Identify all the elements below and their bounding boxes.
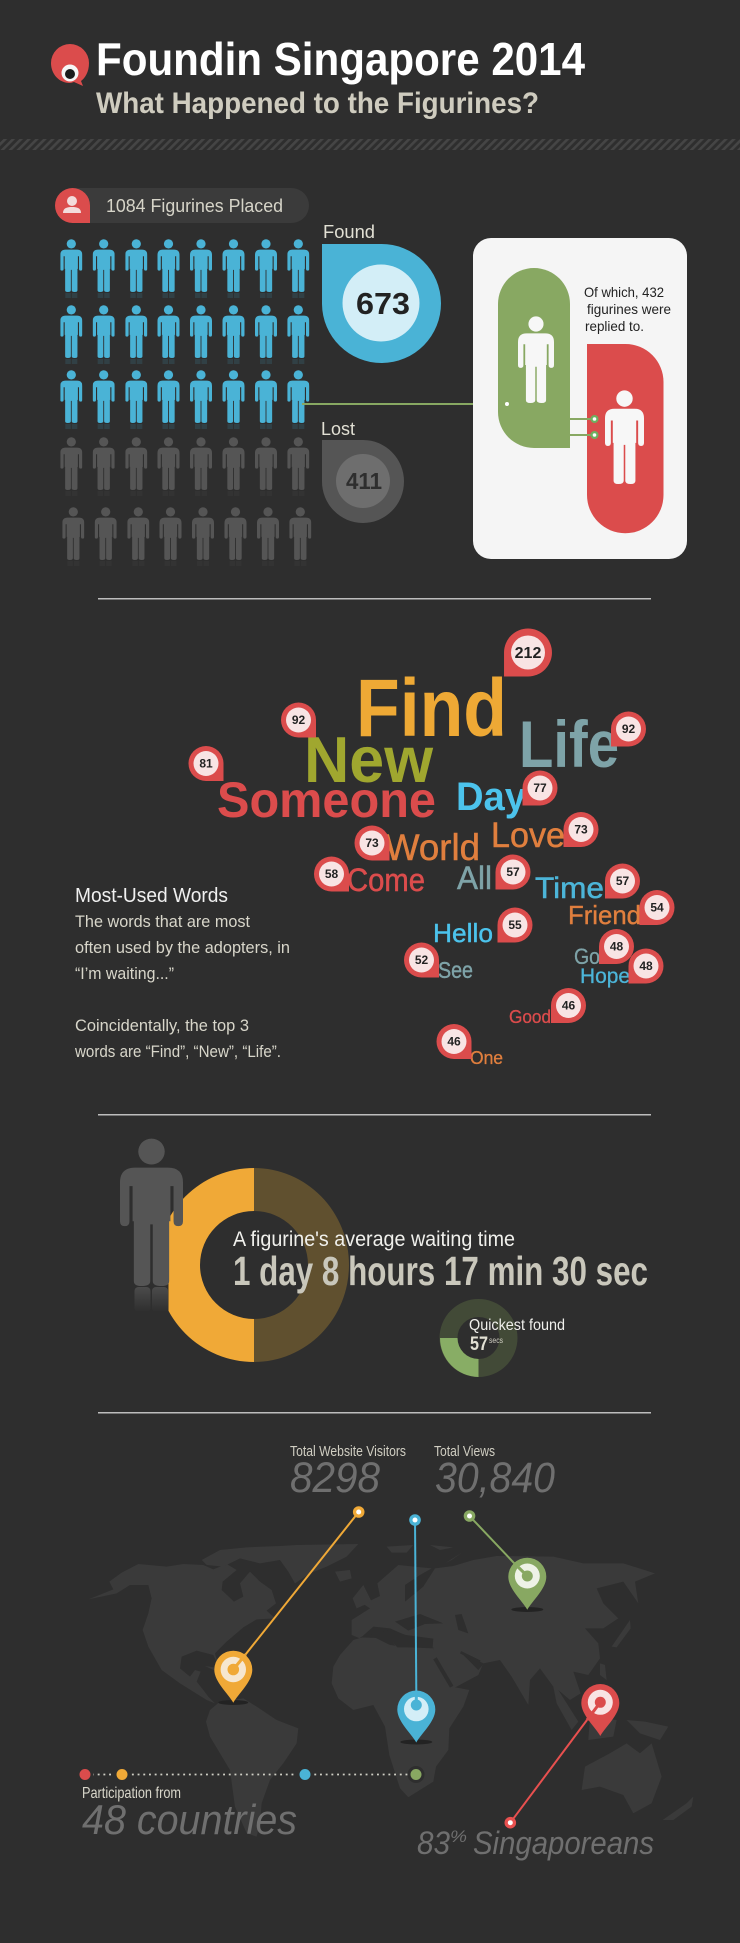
text: quickest found <box>469 1317 565 1355</box>
pin: 92 New <box>281 702 316 738</box>
timeline: participation dots <box>78 1768 423 1782</box>
donut chart: quickest found <box>440 1308 508 1377</box>
stat: total views: 30,840 <box>435 1454 555 1502</box>
pin: 55 Hello: 55 <box>508 918 522 932</box>
text: of which 432 replied <box>584 284 671 334</box>
word: Love: Love <box>491 816 565 855</box>
panel: waiting time <box>120 1139 648 1377</box>
pin: 92 Life: 92 <box>622 722 635 736</box>
word: Good: Good <box>509 1007 551 1027</box>
pin: 46 One: 46 <box>447 1035 461 1049</box>
donut chart: average waiting time <box>157 1168 349 1362</box>
label: lost: Lost <box>321 419 355 439</box>
stat: 411 lost <box>322 440 404 523</box>
pin: 81 Someone: 81 <box>199 757 213 771</box>
label: found: Found <box>323 222 375 242</box>
red capsule with figure <box>587 344 664 533</box>
text: average waiting time label: A figurine's average waiting time <box>233 1228 515 1251</box>
pin: 73 World <box>354 826 390 860</box>
connectors between capsules <box>570 415 598 439</box>
pin: 212 <box>504 629 552 676</box>
pin: 212: 212 <box>515 645 541 662</box>
pin: 73 Love: 73 <box>574 823 588 837</box>
pin: 77 Day: 77 <box>533 781 547 795</box>
pin: 46 Good <box>551 988 586 1023</box>
pin: 92 Life <box>611 712 646 746</box>
word: Hello: Hello <box>433 918 493 948</box>
pin: 54 Friend: 54 <box>650 901 664 915</box>
stat: participation from 48 countries: 48 countries <box>82 1796 297 1843</box>
stat: 673 found: 673 <box>356 286 410 321</box>
pin: 92 New: 92 <box>292 713 305 727</box>
connector line to card <box>302 403 499 405</box>
pin: 77 Day <box>522 770 558 806</box>
text: of which 432 replied: figurines were <box>587 301 671 317</box>
text: of which 432 replied: replied to. <box>585 318 644 334</box>
stat: 83% Singaporeans: % <box>450 1827 467 1846</box>
body text: Coincidentally, the top 3 <box>75 1016 249 1035</box>
word: Life: Life <box>519 707 619 781</box>
panel: figurines placed <box>55 188 499 566</box>
pin: 57 Time <box>605 864 640 898</box>
pin: 57 All <box>496 854 530 890</box>
pictogram: lost figurines <box>60 437 311 566</box>
pin: 57 All: 57 <box>506 865 520 879</box>
pin: 58 Come <box>314 856 349 892</box>
stat: 673 found <box>322 244 441 363</box>
pin: 54 Friend <box>640 890 674 925</box>
pin: 57 Time: 57 <box>616 874 629 888</box>
body text: often used by the adopters, in <box>75 938 290 957</box>
pictogram: found figurines <box>60 239 309 429</box>
body text: The words that are most <box>75 912 250 931</box>
green capsule with figure <box>498 268 570 448</box>
pin: 73 World: 73 <box>365 836 379 850</box>
body text: words are “Find”, “New”, “Life”. <box>74 1042 281 1061</box>
map pin: green <box>464 1510 546 1612</box>
body text <box>74 912 290 1061</box>
text: quickest found: 57 <box>470 1334 488 1355</box>
word: Day: Day <box>456 775 527 819</box>
stat: participation from 48 countries: Participation from <box>82 1785 181 1802</box>
stat: total website visitors: Total Website Visitors <box>290 1443 406 1460</box>
text: of which 432 replied: Of which, 432 <box>584 284 664 300</box>
pin: 46 Good: 46 <box>562 999 575 1013</box>
map pin: red <box>504 1684 619 1828</box>
icon: large standing figure <box>120 1139 183 1312</box>
count pins <box>188 629 674 1059</box>
word: Hope: Hope <box>580 965 630 988</box>
word: Come: Come <box>347 862 425 898</box>
pin: 48 Hope: 48 <box>639 959 653 973</box>
panel: most-used words text <box>74 884 290 1061</box>
stat: 83% Singaporeans: 83 <box>417 1825 450 1861</box>
subtitle: What Happened to the Figurines? <box>96 87 539 120</box>
word: Friend: Friend <box>568 900 641 930</box>
heading: most-used words: Most-Used Words <box>75 884 228 907</box>
pin: 48 Go <box>599 929 634 964</box>
pin: 58 Come: 58 <box>325 867 338 881</box>
pill: 1084 figurines placed <box>55 188 309 223</box>
pin: 52 See: 52 <box>415 953 428 967</box>
stat: total website visitors: 8298 <box>290 1454 380 1502</box>
pin: 73 Love <box>564 812 598 847</box>
text: quickest found: secs <box>489 1336 503 1345</box>
pin: 48 Hope <box>628 948 664 984</box>
word: One: One <box>470 1048 503 1068</box>
stat: 411 lost: 411 <box>346 468 382 494</box>
pin: 48 Go: 48 <box>610 940 623 954</box>
pin: 55 Hello <box>498 908 532 942</box>
word: Someone: Someone <box>217 772 436 828</box>
stat: 83% Singaporeans: Singaporeans <box>473 1825 654 1861</box>
world map <box>88 1544 693 1837</box>
pin: 52 See <box>404 942 439 978</box>
pin: 46 One <box>436 1024 472 1059</box>
text: quickest found: Quickest found <box>469 1317 565 1334</box>
word: All: All <box>457 860 492 896</box>
word: Time: Time <box>535 872 604 905</box>
pin: 81 Someone <box>188 746 224 781</box>
map pin: blue <box>397 1514 435 1744</box>
word: See: See <box>438 957 473 983</box>
stat: total website visitors <box>290 1443 406 1502</box>
pill: 1084 figurines placed: 1084 Figurines Placed <box>106 196 283 216</box>
word: World: World <box>385 827 480 868</box>
word cloud <box>217 663 641 1068</box>
word: Find: Find <box>356 663 507 754</box>
icon: logo speech bubble with eye <box>51 44 89 86</box>
word: Go: Go <box>574 944 600 969</box>
word: New: New <box>304 723 433 796</box>
stat: total views: Total Views <box>434 1443 495 1460</box>
title: Foundin Singapore 2014 <box>96 33 585 85</box>
map pin: orange <box>214 1506 365 1705</box>
panel: replied card <box>473 238 687 559</box>
body text: “I’m waiting...” <box>75 964 174 983</box>
